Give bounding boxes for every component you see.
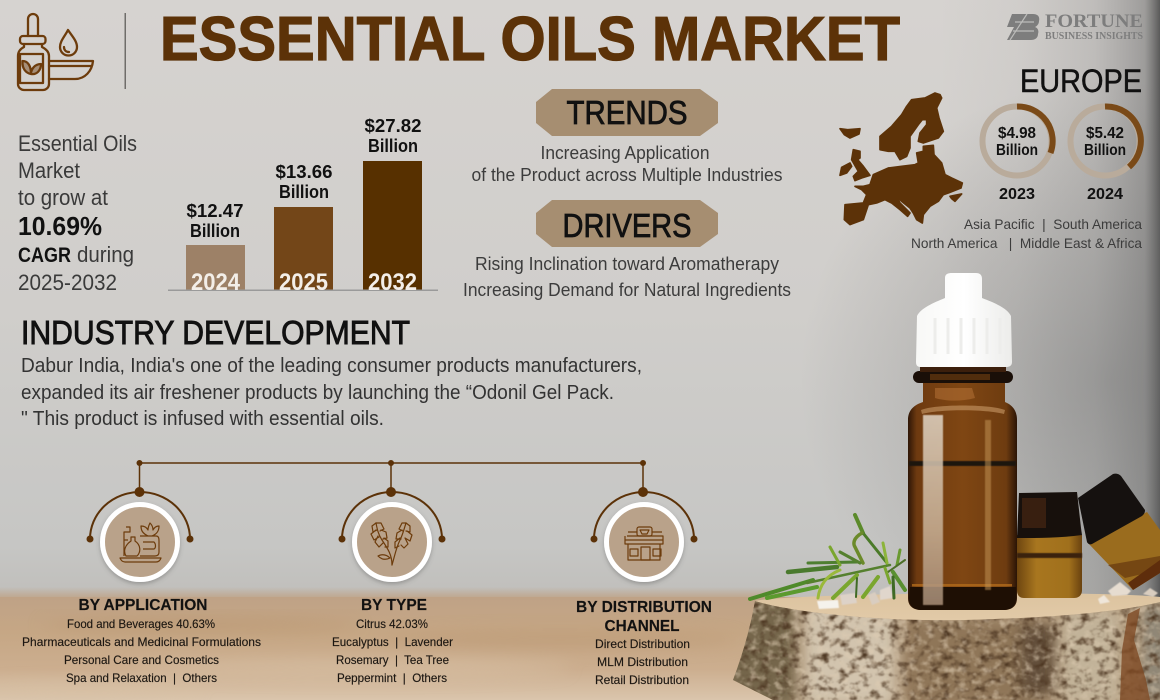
donut: Europe 2023 (982, 106, 1053, 203)
segment text: by application: Spa and Relaxation | Others (66, 671, 217, 685)
text block: CAGR: 10.69% (18, 211, 102, 241)
segment icon: by application (86, 487, 194, 580)
heading: industry development: INDUSTRY DEVELOPMENT (21, 314, 410, 351)
bar chart: market size: $27.82 (364, 116, 422, 136)
connector: segments (137, 460, 646, 492)
photo: salt crystals near sprig (817, 586, 893, 609)
text block: drivers: Rising Inclination toward Aromatherapy (475, 254, 779, 274)
segment text: by distribution channel: BY DISTRIBUTION (576, 599, 712, 616)
segment text: by distribution channel: Retail Distribution (595, 673, 689, 687)
bar chart: market size: Billion (368, 136, 418, 156)
segment text: by type: Eucalyptus | Lavender (332, 635, 453, 649)
photo: tilted small bottle (1078, 474, 1160, 590)
bar chart: market size: Billion (190, 221, 240, 241)
text block: industry development: " This product is infused with essential oils. (21, 408, 384, 430)
logo: Fortune Business Insights (1007, 11, 1143, 42)
segment text: by application: Personal Care and Cosmetics (64, 653, 219, 667)
photo: wooden stump (725, 593, 1160, 700)
segment icon: by distribution channel (590, 487, 698, 580)
donut: Europe 2024: $5.42 (1086, 125, 1124, 142)
badge: trends (536, 89, 718, 136)
bar chart: market size: 2025 (279, 269, 328, 296)
badge: drivers: DRIVERS (562, 207, 692, 244)
donut: Europe 2023: 2023 (999, 186, 1035, 203)
bar chart: market size: 2024 (191, 269, 241, 296)
segment text: by application: BY APPLICATION (78, 597, 208, 614)
segment text: by type (332, 597, 453, 685)
text block: other regions: Asia Pacific | South America (964, 216, 1142, 232)
map: Europe (840, 93, 962, 225)
segment text: by type: BY TYPE (361, 597, 427, 614)
donut: Europe 2024: Billion (1084, 142, 1126, 159)
photo: white bottle cap (916, 273, 1012, 367)
text block: CAGR: CAGR (18, 244, 71, 267)
segment text: by application: Pharmaceuticals and Medicinal Formulations (22, 635, 261, 649)
icon: oil bottle and bowl (18, 14, 93, 90)
text block: industry development (21, 355, 642, 430)
text block: CAGR: during (77, 242, 134, 267)
bar chart: market size: $13.66 (276, 162, 332, 182)
bar chart: market size: 2032 (368, 269, 417, 296)
photo: rosemary sprig (750, 515, 905, 599)
photo: main amber bottle (908, 366, 1017, 610)
segment text: by type: Rosemary | Tea Tree (336, 653, 449, 667)
badge: trends: TRENDS (566, 94, 688, 131)
photo: small upright bottle (1017, 492, 1082, 598)
text block: CAGR: 2025-2032 (18, 270, 117, 295)
segment text: by application (22, 597, 261, 685)
text block: CAGR: to grow at (18, 185, 108, 210)
donut: Europe 2024: 2024 (1087, 186, 1123, 203)
text block: trends: of the Product across Multiple Industries (472, 165, 782, 185)
segment text: by type: Peppermint | Others (337, 671, 447, 685)
background: wooden table (0, 587, 1160, 700)
bar chart: market size: $12.47 (186, 201, 244, 221)
text block: drivers: Increasing Demand for Natural Ingredients (463, 280, 791, 300)
donut: Europe 2023: $4.98 (998, 125, 1036, 142)
segment text: by distribution channel: CHANNEL (604, 618, 680, 635)
text block: drivers (463, 254, 791, 300)
bar chart: market size: Billion (279, 182, 329, 202)
title: ESSENTIAL OILS MARKET (160, 5, 900, 74)
donut: Europe 2024 (1070, 106, 1141, 203)
text block: other regions (911, 216, 1142, 251)
segment text: by type: Citrus 42.03% (356, 617, 428, 631)
text block: CAGR (18, 131, 137, 295)
text block: industry development: Dabur India, India's one of the leading consumer products manufacturers, (21, 355, 642, 377)
text block: trends: Increasing Application (540, 143, 710, 163)
donut: Europe 2023: Billion (996, 142, 1038, 159)
bar chart: market size (168, 116, 438, 296)
segment text: by distribution channel (576, 599, 712, 687)
segment text: by distribution channel: Direct Distribution (595, 637, 690, 651)
text block: trends (472, 143, 782, 185)
logo: Fortune Business Insights: FORTUNE (1045, 11, 1143, 32)
text block: CAGR: Essential Oils (18, 131, 137, 156)
logo: Fortune Business Insights: BUSINESS INSIGHTS (1045, 31, 1143, 42)
text block: other regions: North America | Middle East & Africa (911, 235, 1142, 251)
text block: industry development: expanded its air freshener products by launching the “Odonil Gel Pack. (21, 382, 614, 404)
segment icon: by type (338, 487, 446, 580)
text block: CAGR: Market (18, 158, 80, 183)
badge: drivers (536, 200, 718, 247)
heading: Europe: EUROPE (1020, 63, 1142, 99)
segment text: by application: Food and Beverages 40.63% (67, 617, 215, 631)
segment text: by distribution channel: MLM Distribution (597, 655, 688, 669)
divider: icon and title (124, 13, 126, 89)
photo: salt crystals near bottles (1098, 582, 1158, 604)
